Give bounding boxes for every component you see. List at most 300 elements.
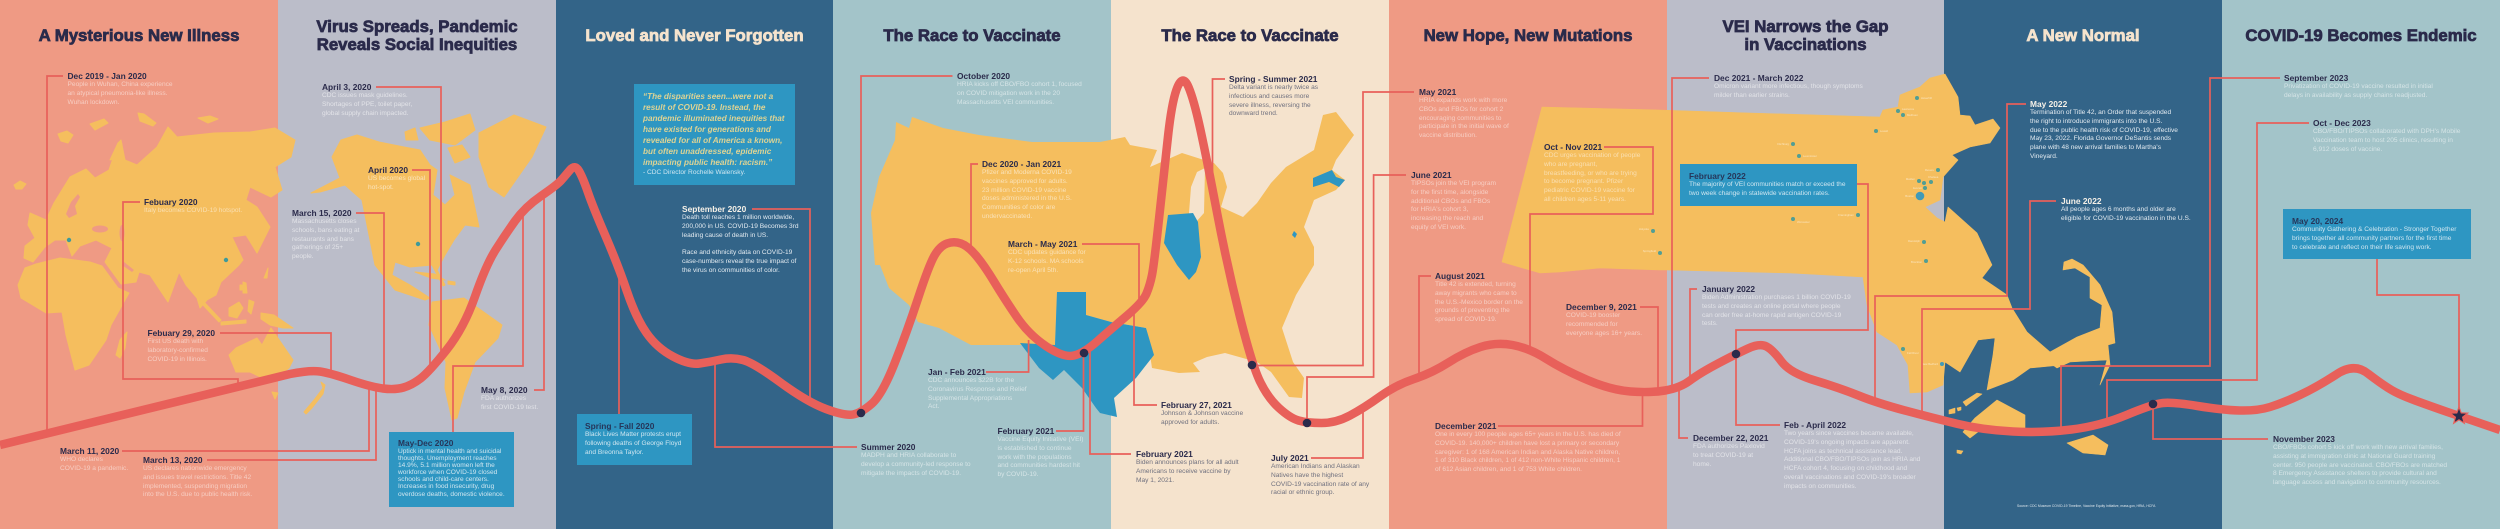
event: Febuary 2020: Italy becomes COVID-19 hotspot. — [144, 207, 242, 214]
event: December 22, 2021: December 22, 2021 — [1693, 433, 1768, 443]
quote text: pandemic illuminated inequities that — [643, 114, 784, 123]
event: September 2020: case-numbers reveal the true impact of — [682, 258, 796, 265]
event: Dec 2020 - Jan 2021: doses administered in the U.S. — [982, 195, 1072, 202]
panel: COVID-19 Becomes Endemic — [2222, 0, 2500, 529]
connector: March 15, 2020 — [356, 213, 384, 388]
callout text: May 20, 2024: Community Gathering & Celebration - Stronger Together — [2292, 226, 2456, 233]
event: Dec 2020 - Jan 2021 — [982, 159, 1072, 220]
event: Febuary 2020 — [144, 197, 242, 214]
event: Feb - April 2022 — [1784, 420, 1920, 490]
marker: Malden: Malden — [1906, 177, 1915, 181]
marker: Springfield — [1643, 249, 1662, 255]
event: October 2020: on COVID mitigation work in the 20 — [957, 90, 1060, 97]
callout text: May-Dec 2020: workforce when COVID-19 closed — [398, 469, 497, 476]
event: Oct - Dec 2023 — [2313, 118, 2460, 153]
event: Dec 2019 - Jan 2020: People in Wuhan, China experience — [68, 81, 173, 88]
map: Caribbean — [415, 272, 455, 285]
event: December 2021: December 2021 — [1435, 421, 1496, 431]
event: November 2023: November 2023 — [2273, 434, 2335, 444]
event: February 27, 2021: approved for adults. — [1161, 419, 1219, 426]
callout: Spring - Fall 2020 — [577, 414, 692, 465]
event: June 2021: increasing the reach and — [1411, 215, 1483, 222]
event: May 2022: Vineyard. — [2030, 153, 2058, 160]
event: March 15, 2020: gatherings of 25+ — [292, 244, 343, 251]
event: February 27, 2021 — [1161, 400, 1243, 426]
callout text: May-Dec 2020 — [398, 438, 505, 498]
heading: The Race to Vaccinate: The Race to Vaccinate — [1161, 26, 1339, 45]
connector: Summer 2020 — [715, 360, 857, 447]
event: March 13, 2020: US declares nationwide emergency — [143, 465, 247, 472]
map: North America — [311, 135, 479, 300]
event: February 2021, Biden: Americans to receive vaccine by — [1136, 468, 1231, 475]
event: May 2021 — [1419, 87, 1509, 139]
map: small islands — [1949, 393, 1982, 454]
marker: Boston: Boston — [1905, 194, 1914, 198]
event: Febuary 2020: Febuary 2020 — [144, 197, 198, 207]
callout: May-Dec 2020 — [389, 432, 514, 507]
marker: Worcester — [1791, 217, 1810, 224]
event: Dec 2021 - March 2022 — [1714, 73, 1863, 99]
event: Dec 2020 - Jan 2021: Dec 2020 - Jan 2021 — [982, 159, 1061, 169]
map: Canadian Arctic islands — [405, 114, 475, 163]
quote text: impacting public health: racism.” — [643, 158, 772, 167]
marker: Cambridge — [1923, 186, 1927, 190]
event: December 22, 2021: FDA authorizes Paxlovid — [1693, 443, 1765, 450]
quote text: but often unaddressed, epidemic — [643, 147, 771, 156]
heading: Virus Spreads, Pandemic Reveals Social Inequities — [316, 17, 518, 54]
event: Dec 2020 - Jan 2021: Pfizer and Moderna COVID-19 — [982, 169, 1072, 176]
event: October 2020: HRIA kicks off CBO/FBO cohort 1, focused — [957, 81, 1082, 88]
event: July 2021: American Indians and Alaskan — [1271, 463, 1360, 470]
marker: Methuen — [1901, 113, 1918, 117]
callout text: Spring - Fall 2020: following deaths of George Floyd — [585, 440, 681, 447]
marker: Lawrence: Lawrence — [1902, 107, 1915, 111]
event: December 9, 2021: COVID-19 booster — [1566, 312, 1620, 319]
event: May 2021: encouraging communities to — [1419, 115, 1501, 122]
event: Feb - April 2022: HCFA joins as technical assistance lead. — [1784, 448, 1902, 455]
heading: The Race to Vaccinate: The Race to Vaccinate — [883, 26, 1061, 45]
connector: April 3, 2020 — [376, 87, 441, 356]
marker: Chelsea — [1928, 175, 1939, 184]
event: May 8, 2020: FDA authorizes — [481, 395, 526, 402]
timeline markers — [857, 349, 2468, 427]
connector: September 2020 — [752, 209, 810, 400]
dot: Italy — [67, 238, 71, 242]
marker: February 2022 — [1732, 350, 1740, 358]
event: February 2021, Biden: Biden announces plans for all adult — [1136, 459, 1239, 466]
map: Texas highlighted — [1020, 292, 1154, 417]
event: February 27, 2021: Johnson & Johnson vaccine — [1161, 410, 1243, 417]
event: Oct - Nov 2021 — [1544, 142, 1640, 203]
event: June 2021: June 2021 — [1411, 170, 1452, 180]
connector: April 2020 — [412, 170, 430, 370]
marker: Chelsea: Chelsea — [1928, 175, 1939, 179]
event: Summer 2020: Summer 2020 — [861, 442, 915, 452]
event: June 2022 — [2061, 196, 2191, 222]
event: Dec 2019 - Jan 2020: Dec 2019 - Jan 2020 — [68, 71, 147, 81]
heading: Loved and Never Forgotten: Loved and Never Forgotten — [585, 26, 804, 45]
event: Feb - April 2022: COVID-19's ongoing impacts are apparent. — [1784, 439, 1910, 446]
event: March 11, 2020: March 11, 2020 — [60, 446, 119, 456]
event: June 2021: for the first time, alongside — [1411, 189, 1488, 196]
event: May 2022: May 2022 — [2030, 99, 2067, 109]
event: May 2021: HRIA expands work with more — [1419, 97, 1507, 104]
sea: Persian Gulf — [122, 262, 134, 272]
connector: December 22, 2021 — [1679, 388, 1688, 438]
event: October 2020 — [957, 71, 1082, 106]
marker: Everett: Everett — [1913, 186, 1922, 190]
event: June 2021: equity of VEI work. — [1411, 224, 1466, 231]
connector: Spring - Summer 2021 — [1212, 79, 1225, 180]
connector: May 8, 2020 — [534, 196, 544, 390]
event: Feb - April 2022: HCFA cohort 4, focusing on childhood and — [1784, 465, 1907, 472]
connector: February 2022 — [1736, 184, 1868, 354]
event: March 15, 2020: Massachusetts closes — [292, 218, 356, 225]
panel: The Race to Vaccinate (part 1) — [833, 0, 1111, 529]
marker: Fitchburg: Fitchburg — [1777, 142, 1789, 146]
event: Summer 2020: MADPH and HRIA collaborate to — [861, 452, 956, 459]
event: March 13, 2020: into the U.S. due to public health risk. — [143, 491, 252, 498]
event: Dec 2020 - Jan 2021: undervaccinated. — [982, 213, 1032, 220]
connector: August 2021 — [1419, 276, 1431, 375]
event: January 2022: Biden Administration purchases 1 billion COVID-19 — [1702, 294, 1851, 301]
event: September 2023 — [2284, 73, 2433, 99]
marker: fall 2020 wave low — [857, 409, 865, 417]
event: December 9, 2021 — [1566, 302, 1642, 337]
quote text: have existed for generations and — [643, 125, 771, 134]
event: November 2023: language access and navigation to community resources. — [2273, 479, 2441, 486]
connector: September 2023 — [2061, 78, 2280, 430]
panel: VEI Narrows the Gap in Vaccinations — [1667, 0, 1944, 529]
event: August 2021: August 2021 — [1435, 271, 1485, 281]
map: Massachusetts highlighted — [1313, 170, 1345, 187]
marker: Brockton — [1911, 259, 1928, 264]
event: Jan - Feb 2021: Supplemental Appropriations — [928, 395, 1012, 402]
event: October 2020: October 2020 — [957, 71, 1010, 81]
quote text — [642, 92, 785, 167]
event: May 2021: participate in the initial wave of — [1419, 123, 1509, 130]
event: Jan - Feb 2021 — [928, 367, 1027, 410]
connector: Febuary 29, 2020 — [220, 333, 331, 372]
quote attribution: - CDC Director Rochelle Walensky. — [643, 168, 745, 176]
event: February 2021, Biden — [1136, 449, 1239, 484]
callout text: May 20, 2024: brings together all community partners for the first time — [2292, 235, 2451, 242]
event: December 22, 2021: home. — [1693, 461, 1711, 468]
event: December 22, 2021 — [1693, 433, 1768, 468]
heading: VEI Narrows the Gap in Vaccinations: VEI Narrows the Gap — [1722, 17, 1888, 36]
marker: Lowell — [1874, 129, 1888, 133]
connector: July 2021 — [1311, 410, 1363, 458]
marker: November 2023 — [2149, 400, 2157, 408]
marker: Lawrence — [1896, 107, 1915, 113]
event: September 2020: leading cause of death in US. — [682, 232, 768, 239]
panel: A Mysterious New Illness — [0, 0, 278, 529]
event: November 2023 — [2273, 434, 2447, 488]
map: Delaware speck — [1292, 231, 1297, 238]
event: Jan - Feb 2021: Act. — [928, 403, 939, 410]
heading: Virus Spreads, Pandemic Reveals Social Inequities: Reveals Social Inequities — [317, 35, 517, 54]
map: New Zealand — [304, 382, 325, 414]
event: September 2020: Race and ethnicity data on COVID-19 — [682, 249, 792, 256]
map: Arctic islands and Iceland — [14, 113, 218, 189]
panel: A New Normal — [1944, 0, 2222, 529]
event: December 2021: of 612 Asian children, and 1 of 753 White children. — [1435, 466, 1582, 473]
event: Feb - April 2022: overall vaccinations and COVID-19's broader — [1784, 474, 1916, 481]
marker: Leominster — [1797, 154, 1817, 158]
event: Spring - Summer 2021 — [1229, 74, 1318, 117]
event: June 2022: All people ages 6 months and older are — [2061, 206, 2176, 213]
event: May 8, 2020: May 8, 2020 — [481, 385, 528, 395]
event: Feb - April 2022: Two years since vaccines became available, — [1784, 430, 1914, 437]
event: Dec 2019 - Jan 2020: Wuhan lockdown. — [68, 99, 119, 106]
event: July 2021 — [1271, 453, 1370, 496]
connector: November 2023 — [2153, 404, 2268, 439]
map: Illinois highlighted — [1164, 213, 1201, 280]
heading: A Mysterious New Illness: A Mysterious New Illness — [39, 26, 239, 45]
event: December 2021: One in every 100 people ages 65+ years in the U.S. has died of — [1435, 431, 1621, 438]
event: February 27, 2021: February 27, 2021 — [1161, 400, 1232, 410]
event: Dec 2020 - Jan 2021: 23 million COVID-19 vaccine — [982, 187, 1066, 194]
callout: Walensky quote — [634, 84, 795, 185]
source note: Source: CDC Museum COVID-19 Timeline, Vaccine Equity Initiative, mass.gov, HRiA, HCFA — [2017, 504, 2155, 508]
quote text: “The disparities seen...were not a — [643, 92, 773, 100]
event: Oct - Dec 2023: CBO/FBO/TIPSOs collaborated with DPH's Mobile — [2313, 128, 2460, 135]
connector: Oct - Nov 2021 — [1530, 147, 1653, 350]
marker: Brockton: Brockton — [1911, 260, 1922, 264]
map: US outline — [871, 112, 1354, 398]
event: March 15, 2020 — [292, 208, 360, 260]
event: May 2022: plane with 48 new arrival families to Martha's — [2030, 144, 2161, 151]
connector: February 2021, Biden — [1090, 350, 1131, 454]
event: September 2020: Death toll reaches 1 million worldwide, — [682, 214, 794, 221]
connector: May 2022 — [1875, 104, 2026, 400]
event: Oct - Dec 2023: Oct - Dec 2023 — [2313, 118, 2371, 128]
quote text: revealed for all of America a known, — [643, 136, 782, 145]
event: March 13, 2020: March 13, 2020 — [143, 455, 203, 465]
event: February 2021, Vaccine Equity Initiative: is established to continue — [998, 445, 1072, 452]
event: March 11, 2020: COVID-19 a pandemic. — [60, 465, 128, 472]
event: March - May 2021: K-12 schools. MA schools — [1008, 258, 1084, 265]
marker: June 2021 — [1303, 419, 1311, 427]
event: January 2022 — [1702, 284, 1851, 327]
event: Dec 2020 - Jan 2021: vaccines approved for adults. — [982, 178, 1068, 185]
event: March 15, 2020: people. — [292, 253, 314, 260]
event: Jan - Feb 2021: Jan - Feb 2021 — [928, 367, 986, 377]
event: June 2022: June 2022 — [2061, 196, 2102, 206]
event: March 15, 2020: March 15, 2020 — [292, 208, 352, 218]
marker: Framingham: Framingham — [1838, 213, 1855, 217]
callout text: Spring - Fall 2020: Spring - Fall 2020 — [585, 421, 654, 431]
marker: Randolph — [1908, 239, 1926, 244]
event: September 2020: September 2020 — [682, 204, 746, 214]
marker: Revere: Revere — [1925, 168, 1934, 172]
heading: VEI Narrows the Gap in Vaccinations: in Vaccinations — [1744, 35, 1867, 54]
map: Lake Michigan — [1189, 168, 1205, 222]
event: August 2021: away migrants who came to — [1435, 290, 1517, 297]
callout text: May-Dec 2020: 14.9%, 5.1 million women left the — [398, 462, 495, 469]
event: April 3, 2020: global supply chain impacted. — [322, 110, 409, 117]
marker: Randolph: Randolph — [1908, 239, 1920, 243]
panel: The Race to Vaccinate (part 2) — [1111, 0, 1389, 529]
event: March 15, 2020: schools, bans eating at — [292, 227, 359, 234]
event: March - May 2021 — [1008, 239, 1086, 274]
event: December 2021: COVID-19. 140,000+ children have lost a primary or secondary — [1435, 440, 1619, 447]
event: April 3, 2020: Shortages of PPE, toilet paper, — [322, 101, 412, 108]
event: February 2021, Vaccine Equity Initiative — [998, 426, 1084, 478]
event: August 2021: Title 42 is extended, turning — [1435, 281, 1516, 288]
event: February 2021, Vaccine Equity Initiative: work with the populations — [998, 454, 1072, 461]
event: Summer 2020 — [861, 442, 971, 477]
event: March - May 2021: March - May 2021 — [1008, 239, 1077, 249]
event: August 2021: the U.S.-Mexico border on the — [1435, 299, 1523, 306]
connector: Jan - Feb 2021 — [986, 340, 1029, 372]
event: Febuary 29, 2020: COVID-19 in Illinois. — [148, 356, 207, 363]
marker: Fall River: Fall River — [1907, 351, 1919, 355]
marker: Malden — [1906, 177, 1921, 183]
timeline curve: COVID-19 wave — [0, 80, 2500, 445]
event: Spring - Summer 2021: Spring - Summer 2021 — [1229, 74, 1317, 84]
connector: March - May 2021 — [1082, 244, 1139, 306]
map: Madagascar — [116, 332, 127, 358]
callout text: May 20, 2024 — [2292, 216, 2456, 252]
map: Massachusetts — [1502, 74, 2115, 455]
event: August 2021: grounds of preventing the — [1435, 307, 1510, 314]
callout text: May 20, 2024: May 20, 2024 — [2292, 216, 2343, 226]
event: November 2023: 8 Emergency Assistance shelters to provide cultural and — [2273, 470, 2437, 477]
event: June 2021: TIPSOs join the VEI program — [1411, 180, 1496, 187]
event: Oct - Nov 2021: all children ages 5-11 years. — [1544, 196, 1626, 203]
event: September 2020 — [682, 204, 799, 274]
map: Eurasia — [24, 127, 295, 308]
callout text: Spring - Fall 2020 — [585, 421, 681, 456]
callout text: February 2022: February 2022 — [1689, 171, 1746, 181]
callout text: Spring - Fall 2020: and Breonna Taylor. — [585, 449, 644, 456]
event: Spring - Summer 2021: severe illness, reversing the — [1229, 102, 1311, 109]
callout text: May-Dec 2020: May-Dec 2020 — [398, 438, 453, 448]
marker: May 2024 star — [2450, 407, 2468, 423]
map: inland seas — [66, 194, 134, 272]
event: March 11, 2020: WHO declares — [60, 456, 103, 463]
marker: Leominster: Leominster — [1803, 154, 1817, 158]
event: May 8, 2020 — [481, 385, 538, 411]
event: June 2021: additional CBOs and FBOs — [1411, 198, 1490, 205]
connector: December 2021 — [1498, 392, 1642, 426]
callout text: May-Dec 2020: thoughts. Unemployment reaches — [398, 455, 497, 462]
connector: June 2021 — [1307, 175, 1406, 423]
event: February 2021, Biden: May 1, 2021. — [1136, 477, 1174, 484]
event: May 8, 2020: first COVID-19 test. — [481, 404, 538, 411]
connector: May 20, 2024 — [2377, 259, 2459, 416]
heading: VEI Narrows the Gap in Vaccinations — [1722, 17, 1888, 54]
callout text: May-Dec 2020: schools and child-care centers. — [398, 476, 489, 483]
marker: Worcester: Worcester — [1797, 220, 1810, 224]
callout text: May-Dec 2020: overdose deaths, domestic violence. — [398, 491, 505, 498]
event: July 2021: July 2021 — [1271, 453, 1309, 463]
marker: May 2021 — [1248, 361, 1256, 369]
connector: May 2021 — [1252, 92, 1414, 366]
map: hot-spot dots on world map — [67, 238, 420, 262]
event: Dec 2021 - March 2022: Dec 2021 - March 2022 — [1714, 73, 1803, 83]
marker: Haverhill — [1915, 96, 1932, 100]
event: Dec 2019 - Jan 2020: an atypical pneumonia-like illness. — [68, 90, 168, 97]
event: Dec 2021 - March 2022: milder than earlier strains. — [1714, 92, 1790, 99]
connector: March 11, 2020 — [122, 386, 369, 451]
event: Spring - Summer 2021: downward trend. — [1229, 110, 1278, 117]
callout text: May-Dec 2020: Uptick in mental health and suicidal — [398, 448, 501, 455]
marker: Lowell: Lowell — [1880, 129, 1888, 133]
event: Summer 2020: develop a community-led response to — [861, 461, 971, 468]
map: Tasmania, Indonesia, Philippines and New Guinea — [203, 268, 293, 399]
event: May 2022: due to the public health risk of COVID-19, effective — [2030, 127, 2178, 134]
event: May 2021: CBOs and FBOs for cohort 2 — [1419, 106, 1503, 113]
event: September 2020: 200,000 in US. COVID-19 Becomes 3rd — [682, 223, 799, 230]
event: February 2021, Vaccine Equity Initiative: and communities hardest hit — [998, 462, 1080, 469]
event: January 2022: tests and creates an online portal where people — [1702, 303, 1841, 310]
connector: February 2021, VEI — [1056, 353, 1084, 431]
event: Oct - Nov 2021: to become pregnant. Pfizer — [1544, 178, 1623, 185]
event: November 2023: CBO/FBOs cohort 5 kick off work with new arrival families, — [2273, 444, 2443, 451]
connector: June 2022 — [1922, 201, 2056, 414]
event: February 2021, Vaccine Equity Initiative: by COVID-19. — [998, 471, 1039, 478]
event: June 2022: eligible for COVID-19 vaccination in the U.S. — [2061, 215, 2191, 222]
event: August 2021: spread of COVID-19. — [1435, 316, 1497, 323]
panel: Loved and Never Forgotten — [556, 0, 833, 529]
connector: Dec 2020 - Jan 2021 — [971, 164, 978, 250]
event: October 2020: Massachusetts VEI communities. — [957, 99, 1054, 106]
event: March 13, 2020: and issues travel restrictions. Title 42 — [143, 474, 251, 481]
quote text: result of COVID-19. Instead, the — [643, 103, 765, 112]
marker: Springfield: Springfield — [1643, 249, 1656, 253]
marker: Holyoke: Holyoke — [1639, 227, 1649, 231]
connector: Dec 2021 - March 2022 — [1672, 78, 1709, 388]
event: May 2022: Termination of Title 42, an Order that suspended — [2030, 109, 2171, 116]
event: Dec 2019 - Jan 2020 — [68, 71, 173, 106]
event: July 2021: racial or ethnic group. — [1271, 489, 1334, 496]
event: January 2022: can order free at-home rapid antigen COVID-19 — [1702, 312, 1841, 319]
event: May 2021: vaccine distribution. — [1419, 132, 1477, 139]
map: Nantucket — [2067, 435, 2108, 455]
event: December 2021: 1 of 310 Black children, 1 of 412 non-White Hispanic children, 1 — [1435, 457, 1620, 464]
event: Febuary 29, 2020: Febuary 29, 2020 — [148, 328, 215, 338]
marker: Haverhill: Haverhill — [1921, 96, 1932, 100]
event: February 2021, Vaccine Equity Initiative: Vaccine Equity Initiative (VEI) — [998, 436, 1084, 443]
event: December 22, 2021: to treat COVID-19 at — [1693, 452, 1753, 459]
event: March - May 2021: CDC updates guidance for — [1008, 249, 1086, 256]
event: Febuary 29, 2020: laboratory-confirmed — [148, 347, 208, 354]
event: Dec 2021 - March 2022: Omicron variant more infectious, though symptoms — [1714, 83, 1863, 90]
event: Spring - Summer 2021: infectious and causes more — [1229, 93, 1309, 100]
event: March 11, 2020 — [60, 446, 128, 472]
event: Febuary 29, 2020: First US death with — [148, 338, 203, 345]
map: VEI community markers — [1639, 96, 1944, 366]
connectors: event leader lines — [47, 76, 2459, 460]
callout text: May-Dec 2020: Increases in food insecurity, drug — [398, 483, 494, 490]
event: November 2023: assisting at immigration clinic at National Guard training — [2273, 453, 2435, 460]
map: South America — [429, 298, 502, 420]
marker: New Bedford: New Bedford — [1922, 362, 1938, 366]
marker: Boston — [1905, 192, 1924, 200]
event: April 2020 — [368, 165, 425, 191]
heading: COVID-19 Becomes Endemic: COVID-19 Becomes Endemic — [2245, 26, 2477, 45]
event: July 2021: Natives have the highest — [1271, 472, 1343, 479]
heading: A New Normal: A New Normal — [2026, 26, 2140, 45]
event: September 2020: the virus on communities of color. — [682, 267, 780, 274]
event: May 2022: May 23, 2022. Florida Governor DeSantis sends — [2030, 135, 2171, 142]
event: April 3, 2020 — [322, 82, 412, 117]
map: Massachusetts mainland and Cape Cod — [1502, 74, 2115, 393]
map: Martha's Vineyard — [1963, 400, 2025, 438]
sea: Caspian — [120, 225, 124, 241]
